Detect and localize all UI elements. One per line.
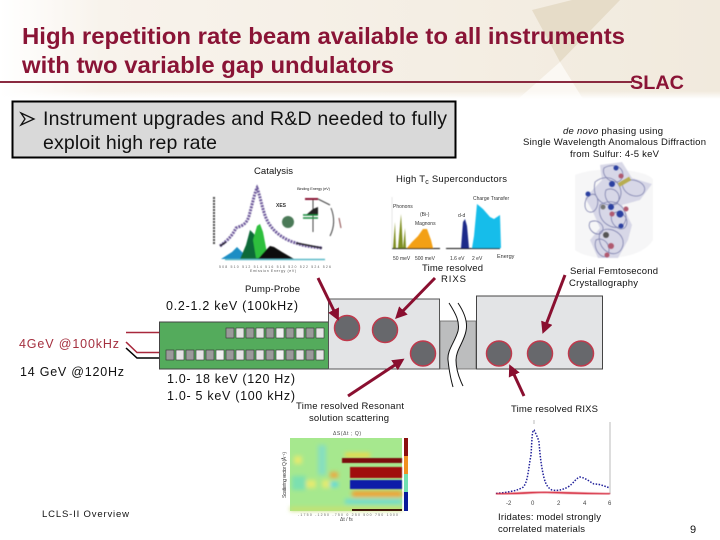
label: catalysis: Catalysis — [254, 166, 293, 177]
label: high Tc superconductors: c — [425, 179, 429, 186]
beam lines — [126, 332, 159, 358]
colour bar — [404, 438, 408, 511]
label: serial femtosecond crystallography: Crystallography — [569, 278, 638, 289]
undulator hall: green box — [160, 322, 328, 369]
label: 14 GeV: 14 GeV @120Hz — [20, 365, 124, 379]
chart: catalysis spectrum: Binding Energy (eV) — [297, 186, 331, 191]
chart: iridate RIXS spectrum: 4 — [583, 501, 587, 507]
callout box: instrument upgrades: Instrument upgrades and R&D needed to fully — [43, 108, 447, 130]
chart: catalysis spectrum — [214, 186, 341, 273]
chart: superconductor RIXS spectrum — [392, 196, 515, 262]
chart: superconductor RIXS spectrum: 500 meV — [415, 256, 436, 262]
chart: scattering heat map — [281, 431, 408, 523]
chart: scattering heat map: Scattering vector Q (Å⁻¹) — [281, 452, 288, 498]
callout box: instrument upgrades: exploit high rep rate — [43, 132, 217, 154]
experimental hall 1 — [328, 299, 440, 369]
label: serial femtosecond crystallography — [569, 266, 658, 289]
label: iridates: correlated materials — [498, 524, 585, 535]
arrows to instruments — [318, 275, 565, 396]
label: iridates: Iridates: model strongly — [498, 512, 601, 523]
chart: superconductor RIXS spectrum: Energy — [497, 254, 515, 260]
chart: iridate RIXS spectrum: -2 — [506, 501, 512, 507]
chart: scattering heat map: ΔS(Δt ; Q) — [333, 431, 361, 437]
undulator segments top row — [226, 328, 324, 338]
chart: scattering heat map: Δt / fs — [340, 517, 353, 523]
label: high Tc superconductors: Superconductors — [429, 174, 507, 185]
label: time resolved resonant scattering: Time resolved Resonant — [296, 401, 404, 412]
chart: iridate RIXS spectrum: 6 — [608, 501, 612, 507]
image: protein crystal structure — [575, 162, 653, 258]
label: de novo phasing — [523, 126, 706, 160]
label: high Tc superconductors: High T — [396, 174, 425, 185]
label: time resolved RIXS lower: Time resolved RIXS — [511, 404, 598, 415]
chart: superconductor RIXS spectrum: 1.6 eV — [450, 256, 465, 262]
experimental hall 2 — [476, 296, 602, 369]
tunnel section — [440, 321, 476, 369]
label: hard x-ray range: 1.0- 5 keV (100 kHz) — [167, 389, 295, 403]
chart: iridate RIXS spectrum: 0 — [531, 501, 535, 507]
label: 4 GeV: 4GeV @100kHz — [19, 337, 119, 351]
bullet arrow — [21, 113, 34, 125]
undulator segments bottom row — [166, 350, 324, 360]
chart: superconductor RIXS spectrum: (Bi-) — [420, 212, 430, 218]
label: soft x-ray range: 0.2-1.2 keV (100kHz) — [166, 299, 298, 313]
title: with two variable gap undulators — [21, 52, 394, 78]
chart: catalysis spectrum: Emission Energy (eV) — [250, 269, 296, 273]
chart: catalysis spectrum: 508 510 512 514 516 518 520 522 524 526 — [219, 265, 331, 269]
chart: superconductor RIXS spectrum: d-d — [458, 213, 465, 219]
chart: catalysis spectrum: XES — [276, 203, 287, 209]
instrument stations — [334, 316, 594, 366]
chart: superconductor RIXS spectrum: 50 meV — [393, 256, 411, 262]
label: hard x-ray range — [167, 372, 295, 403]
header background — [0, 0, 720, 99]
label: time resolved resonant scattering: solution scattering — [309, 413, 389, 424]
callout box: instrument upgrades — [12, 102, 456, 158]
label: de novo phasing: de novo phasing using — [563, 126, 663, 137]
chart: superconductor RIXS spectrum: Magnons — [415, 221, 436, 227]
break mark — [448, 303, 467, 387]
label: time resolved resonant scattering — [296, 401, 404, 424]
label: hard x-ray range: 1.0- 18 keV (120 Hz) — [167, 372, 295, 386]
label: time resolved RIXS upper — [422, 263, 483, 285]
chart: superconductor RIXS spectrum: Phonons — [393, 204, 413, 210]
SLAC logo: SLAC — [630, 73, 684, 94]
label: iridates — [498, 512, 601, 535]
label: time resolved RIXS upper: Time resolved — [422, 263, 483, 274]
chart: superconductor RIXS spectrum: Charge Transfer — [473, 196, 509, 202]
title: High repetition rate beam available to all instruments — [22, 23, 625, 49]
label: time resolved RIXS upper: RIXS — [441, 274, 466, 285]
label: de novo phasing: Single Wavelength Anomalous Diffraction — [523, 137, 706, 148]
page number: 9 — [690, 524, 696, 536]
title rule — [0, 81, 632, 83]
chart: scattering heat map: -1750 -1250 -750 0 250 500 750 1000 — [298, 513, 398, 517]
label: pump-probe: Pump-Probe — [245, 284, 300, 295]
label: de novo phasing: from Sulfur: 4-5 keV — [570, 149, 660, 160]
chart: iridate RIXS spectrum — [496, 420, 612, 507]
title — [21, 23, 625, 78]
label: serial femtosecond crystallography: Serial Femtosecond — [570, 266, 658, 277]
chart: superconductor RIXS spectrum: 2 eV — [472, 256, 483, 262]
chart: iridate RIXS spectrum: 2 — [557, 501, 561, 507]
footer: LCLS-II overview: LCLS-II Overview — [42, 509, 129, 520]
